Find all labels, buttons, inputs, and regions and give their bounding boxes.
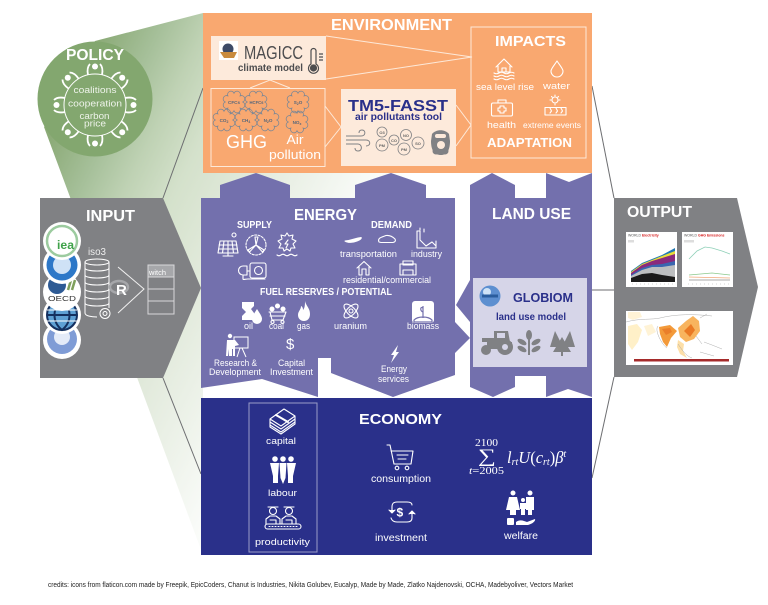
air pollution label: Air (286, 132, 304, 147)
icon: water drop (551, 61, 563, 77)
energy services: services (378, 374, 409, 385)
clouds of gases: O (269, 118, 273, 123)
GLOBIOM title: GLOBIOM (513, 290, 573, 305)
clouds of gases: 2 (297, 102, 299, 106)
transportation label: transportation (340, 249, 397, 260)
capital investment (270, 336, 313, 378)
fuel labels: oil (244, 321, 253, 332)
fuel labels: uranium (334, 321, 367, 332)
icon: biomass (412, 301, 434, 323)
policy labels: carbon (80, 111, 110, 121)
panel: MAGICC climate model (211, 36, 326, 80)
gas bubbles: PM (401, 147, 408, 152)
clouds of gases: O (299, 100, 303, 105)
productivity label: productivity (255, 537, 310, 548)
gas bubbles (376, 127, 424, 155)
extreme events label: extreme events (523, 121, 581, 130)
data source logos (43, 222, 81, 359)
formula: welfare function: (c (530, 448, 543, 467)
fuel labels (244, 321, 439, 332)
panel: input (40, 198, 201, 378)
capital investment: Capital (278, 358, 305, 369)
health label: health (487, 120, 516, 131)
panel: economy (201, 398, 592, 555)
formula: welfare function: ∑ (478, 446, 496, 467)
icon: productivity workers (265, 507, 301, 529)
icon: wind (346, 130, 370, 151)
icon: solar panel (218, 233, 238, 256)
research and development (209, 334, 261, 378)
icon: trees (550, 331, 575, 356)
air pollutants tool subtitle: air pollutants tool (355, 112, 442, 123)
policy labels: price (84, 118, 106, 128)
water label: water (542, 81, 570, 92)
welfare label: welfare (503, 531, 538, 542)
policy labels: coalitions (74, 85, 117, 95)
witch table: witch (148, 270, 166, 277)
icon: car (379, 235, 395, 242)
logo: World Bank (43, 296, 81, 334)
icon: welfare family (506, 490, 535, 525)
TM5-FASST title: TM5-FASST (348, 98, 448, 115)
heading: impacts: IMPACTS (495, 33, 566, 50)
gas bubbles: SO (415, 141, 421, 146)
policy labels (68, 85, 122, 128)
heading: adaptation: ADAPTATION (487, 135, 572, 150)
capital investment: Investment (270, 367, 313, 378)
logo: OECD: OECD (48, 294, 77, 303)
chart: electricity stacked area: WORLD Electricity (628, 234, 659, 238)
icon: extreme events (545, 95, 566, 115)
icon: shop (400, 261, 416, 275)
panel: impacts and adaptation (471, 27, 586, 158)
energy services: Energy (381, 364, 407, 375)
formula: welfare function: rt (543, 457, 550, 468)
formula: welfare function: l (507, 448, 512, 467)
panel: GHG and air pollution (211, 88, 325, 166)
formula: welfare function: rt (512, 457, 518, 468)
icon: health kit (492, 100, 512, 116)
heading: energy: ENERGY (294, 207, 357, 224)
icon: wind turbine (246, 235, 266, 255)
credits: credits: icons from flaticon.com made by Freepik, EpicCoders, Chanut is Industries, Nikita Golubev, Eucalyp, Made by Made, Zlatko Najdenovski, OCHA, Madebyoliver, Vectors Market (48, 582, 573, 589)
icon: airplane (345, 238, 361, 242)
supply group (218, 220, 297, 279)
clouds of gases (213, 91, 309, 133)
connector lines to output (592, 86, 614, 478)
icon: shopping cart (387, 445, 413, 470)
icon: presenter (226, 334, 248, 357)
connector lines from input (163, 88, 203, 474)
icon: capital banknotes (270, 409, 295, 434)
climate model subtitle: climate model (238, 63, 303, 74)
icon: oil barrel (242, 302, 262, 324)
capital label: capital (266, 436, 296, 447)
panel: output (614, 198, 758, 377)
icon: tractor (481, 331, 513, 355)
fuel reserves group: FUEL RESERVES / POTENTIAL (260, 287, 392, 298)
residential commercial label: residential/commercial (343, 275, 431, 286)
iso3 label: iso3 (88, 247, 106, 258)
clouds of gases: HCFCs (250, 100, 264, 105)
gas bubbles: O3 (379, 130, 385, 135)
research and development: Research & (214, 358, 258, 369)
land use model subtitle: land use model (496, 311, 566, 323)
chart: GHG emissions lines (682, 232, 733, 287)
fuel reserves group (242, 287, 439, 332)
panel: policy (38, 42, 152, 156)
icon: gas mask (431, 130, 450, 155)
formula: welfare function: t=2005 (469, 466, 504, 477)
consumption label: consumption (371, 474, 431, 485)
demand group: DEMAND (371, 220, 412, 231)
industry label: industry (411, 249, 442, 260)
clouds of gases: N (264, 118, 267, 123)
icon: plant (516, 330, 542, 355)
witch table (148, 265, 174, 314)
formula: welfare function: 2100 (475, 438, 498, 449)
panel: TM5-FASST (341, 89, 456, 166)
icon: sea level rise (494, 59, 514, 80)
clouds of gases: 2 (226, 120, 228, 124)
icon: uranium atom (342, 302, 360, 320)
R logo: R (116, 282, 127, 299)
heading: land use: LAND USE (492, 206, 571, 223)
arrow lines through R (118, 267, 144, 313)
formula: welfare function: β (555, 448, 563, 467)
R logo (110, 281, 128, 299)
formula: welfare function: ) (550, 448, 555, 467)
icon: gas flame (298, 301, 310, 321)
icon: house (357, 262, 371, 275)
energy services (378, 345, 409, 385)
heading: output: OUTPUT (627, 204, 692, 221)
clouds of gases: NO (293, 120, 299, 125)
gas bubbles: PM (379, 143, 386, 148)
clouds of gases: 4 (248, 120, 250, 124)
panel: energy (201, 173, 470, 397)
fuel labels: coal (269, 321, 284, 332)
gas bubbles: NO (403, 133, 409, 138)
logo: United Nations (43, 246, 81, 284)
supply group: SUPPLY (237, 220, 272, 231)
formula: welfare function: t (563, 449, 566, 460)
heading: policy: POLICY (66, 47, 124, 64)
map: pollution over Asia (626, 311, 733, 365)
research and development: Development (209, 367, 261, 378)
icon: investment cycle (389, 502, 415, 522)
heading: environment: ENVIRONMENT (331, 17, 453, 34)
chart: GHG emissions lines: WORLD GHG Emissions (684, 234, 725, 238)
icon: thermometer (308, 48, 323, 73)
demand group (340, 220, 442, 286)
icon: coal cart (269, 304, 286, 324)
clouds of gases: 2 (267, 120, 269, 124)
clouds of gases: CH (242, 118, 248, 123)
panel: economy: $ (396, 506, 404, 520)
fuel labels: gas (297, 321, 310, 332)
MAGICC title: MAGICC (244, 43, 303, 63)
heading: input: INPUT (86, 208, 135, 225)
logo: IEA: iea (57, 238, 74, 252)
clouds of gases: x (299, 122, 301, 126)
icon: labour group (270, 456, 296, 484)
panel: environment (203, 13, 592, 173)
GHG label: GHG (226, 132, 267, 152)
gas bubbles: CO (391, 138, 397, 143)
labour label: labour (268, 488, 297, 499)
formula: welfare function: U (518, 448, 531, 467)
icon: hydro power (277, 233, 297, 256)
arrows between environment boxes (250, 36, 472, 147)
air pollution label: pollution (269, 147, 321, 162)
icon: lightning bolt (391, 345, 399, 363)
sea level rise label: sea level rise (476, 82, 534, 93)
negotiation table ring (64, 74, 126, 136)
policy influence gradient wedge (44, 13, 470, 555)
heading: economy: ECONOMY (359, 411, 442, 428)
clouds of gases: S (294, 100, 297, 105)
icon: factory (417, 228, 436, 248)
panel: GLOBIOM (473, 278, 587, 367)
investment label: investment (375, 533, 427, 544)
policy labels: cooperation (68, 98, 122, 108)
icon: plug and socket (238, 263, 266, 279)
air pollution label (269, 132, 321, 162)
icon: GLOBIOM globe (480, 286, 500, 306)
group box: production factors (249, 403, 317, 552)
formula: welfare function (469, 438, 566, 477)
icon: people around table (54, 64, 136, 146)
clouds of gases: CFCs (228, 100, 240, 105)
logo: IMF (43, 321, 81, 359)
clouds of gases: CO (220, 118, 226, 123)
chart: electricity stacked area (626, 232, 677, 287)
panel: land use (456, 173, 592, 397)
icon: dollar sign: $ (286, 336, 295, 353)
fuel labels: biomass (407, 321, 439, 332)
icon: database (85, 259, 110, 318)
icon: MAGICC logo (219, 41, 238, 60)
